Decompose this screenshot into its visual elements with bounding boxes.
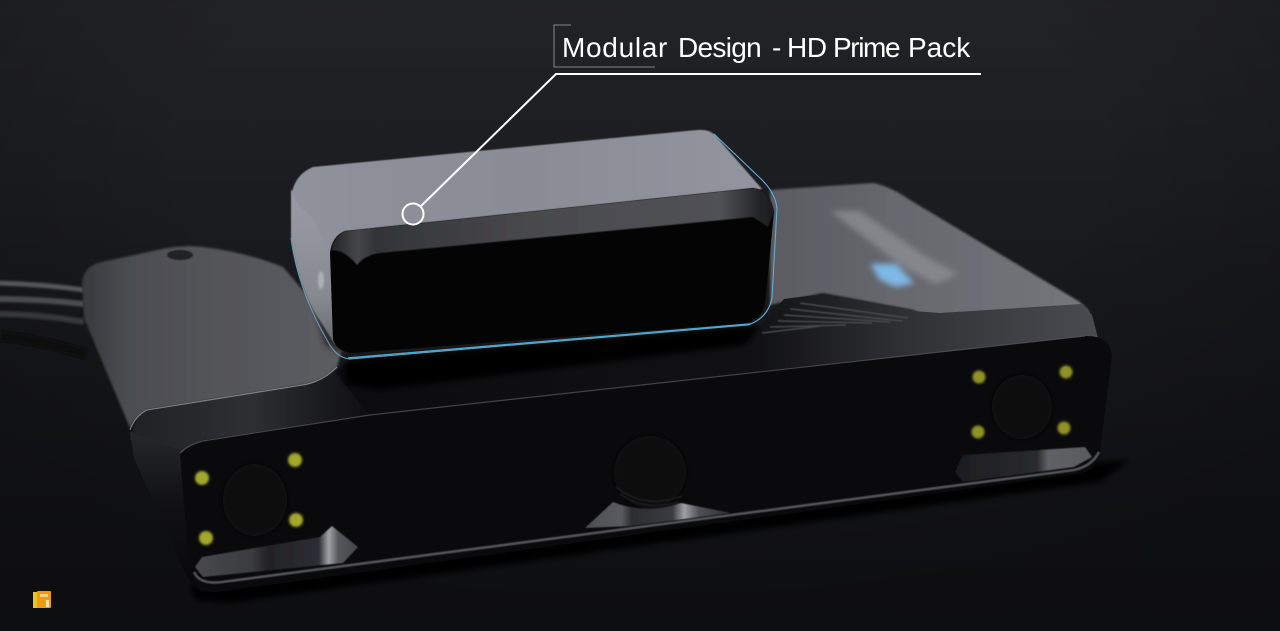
title: Design <box>678 32 768 63</box>
chamfer strip right <box>335 294 1098 416</box>
right lens <box>992 375 1052 439</box>
vent slots <box>762 303 908 333</box>
left sensor window <box>195 453 358 577</box>
module shadow on body <box>310 280 345 355</box>
body top surface right <box>770 183 1090 322</box>
front face bottom edge <box>194 452 1099 583</box>
front face <box>180 336 1112 592</box>
center sensor window <box>585 436 731 528</box>
HD Prime Pack module <box>291 130 777 390</box>
title: - <box>772 32 789 63</box>
module top face <box>292 130 762 250</box>
left side edge <box>130 432 222 592</box>
front face top highlight <box>180 336 1085 453</box>
right sensor window <box>955 366 1092 482</box>
module under-shadow <box>345 326 760 390</box>
module bezel top strip <box>331 188 774 265</box>
center prism <box>585 502 731 528</box>
scanner body <box>82 183 1130 603</box>
title: Prime <box>833 32 906 63</box>
marker circle <box>402 204 424 224</box>
blurred product logo <box>830 211 958 287</box>
drop shadow under scanner <box>190 460 1130 603</box>
callout: leader line and marker <box>402 25 981 224</box>
cables <box>0 283 86 354</box>
title: Modular <box>562 32 677 63</box>
module front bezel <box>330 188 774 353</box>
icon: watermark badge <box>33 591 51 608</box>
chamfer strip left <box>130 367 370 455</box>
mounting hole <box>167 250 193 260</box>
LED group right <box>972 366 1072 438</box>
center lens ribs <box>616 487 682 506</box>
LED group left <box>195 453 303 545</box>
left lens <box>223 464 287 536</box>
leader line <box>420 74 981 207</box>
chamfer highlight <box>130 367 337 430</box>
left lens prism <box>195 526 358 577</box>
title: Pack <box>908 32 971 63</box>
module side face <box>291 190 345 345</box>
module cyan outline <box>291 134 777 359</box>
title: HD <box>787 32 834 63</box>
side port <box>318 271 324 289</box>
body top surface left <box>82 246 345 428</box>
decorative bracket <box>554 25 655 67</box>
right lens prism <box>955 447 1092 482</box>
center lens <box>614 436 686 508</box>
